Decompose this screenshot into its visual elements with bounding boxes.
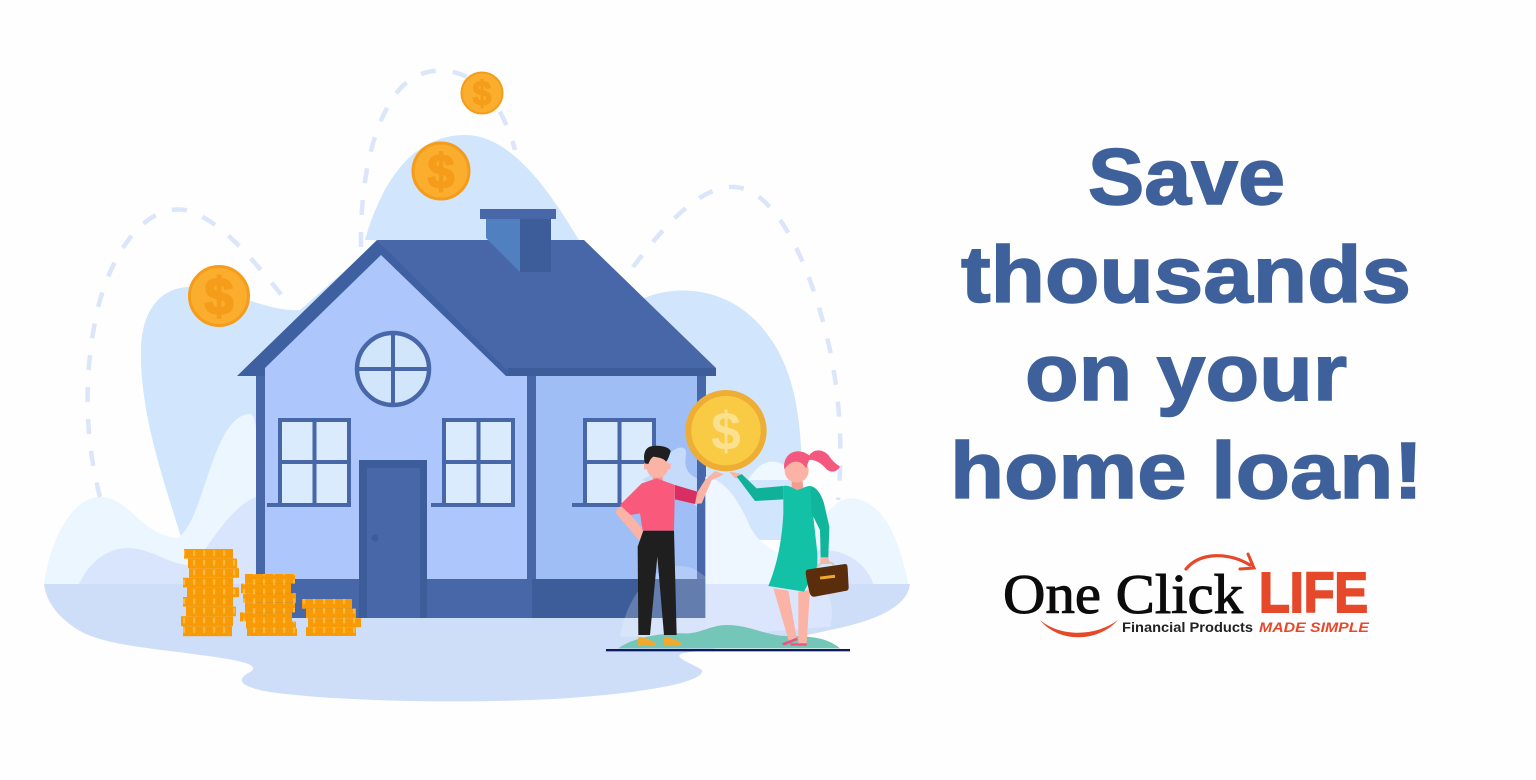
ground (44, 584, 910, 701)
pale hills (44, 414, 258, 584)
woman: hand (729, 472, 743, 478)
stack 2 (240, 574, 297, 636)
logo LIFE: LIFE (1259, 561, 1368, 625)
woman: far sleeve (810, 486, 829, 557)
door (359, 460, 427, 618)
logo: One Click Life (1003, 554, 1370, 637)
hill right of the house (705, 477, 817, 584)
man: arms skin (616, 471, 724, 546)
floating coin: middle: $ (428, 146, 455, 199)
logo swoosh (1040, 620, 1118, 637)
woman: neck and head (792, 480, 803, 490)
translucent hill over house base (620, 566, 705, 637)
floating coin: middle (413, 143, 469, 199)
man: sleeve (675, 485, 697, 504)
green mound (618, 625, 840, 648)
logo wordmark: One Click (1003, 564, 1243, 626)
left window (267, 420, 351, 507)
house (237, 209, 716, 618)
man: shoes (638, 637, 682, 646)
base (256, 579, 706, 618)
logo slogan: MADE SIMPLE (1259, 620, 1370, 635)
floating coin: left: $ (205, 268, 234, 326)
man: trousers (638, 531, 677, 635)
logo tagline: Financial Products (1122, 620, 1253, 635)
floating coin: top (462, 72, 502, 114)
woman: legs (773, 588, 810, 643)
man: hair (644, 446, 671, 464)
woman: near sleeve (737, 474, 783, 501)
man (616, 446, 724, 646)
illustration background: hills and ground (44, 135, 910, 701)
headline line 3: on your (1025, 328, 1347, 417)
people scene (606, 390, 908, 651)
blue blobs (141, 135, 802, 540)
cloud behind woman (748, 462, 797, 480)
headline line 1: Save (1088, 132, 1285, 221)
hill right of the woman (813, 498, 908, 584)
roof (237, 240, 716, 376)
floating coin: left (190, 266, 248, 326)
headline (950, 132, 1423, 515)
foreground hills (620, 448, 908, 637)
stack 3 (302, 599, 361, 636)
walls (256, 250, 702, 580)
headline line 4: home loan! (950, 426, 1423, 515)
woman: dress (768, 486, 817, 592)
man: head (644, 453, 671, 478)
mid hill right of the woman (817, 550, 873, 584)
large coin (685, 390, 767, 471)
logo arrow (1186, 554, 1254, 569)
coin stacks (181, 549, 361, 636)
round window (357, 333, 429, 405)
hill over house wall (642, 448, 697, 507)
chimney (480, 209, 556, 272)
headline line 2: thousands (961, 230, 1411, 319)
right window (572, 420, 656, 507)
woman: hand on bag (820, 557, 830, 564)
floor line (606, 649, 850, 651)
woman (729, 450, 849, 646)
briefcase (806, 562, 849, 597)
floating coin: top: $ (473, 75, 492, 113)
woman: hair and ponytail (784, 450, 840, 472)
man: shirt (620, 478, 675, 531)
stack 1 (181, 549, 239, 636)
woman: shoes (782, 638, 807, 646)
man: neck (653, 473, 663, 482)
wall columns (256, 376, 706, 580)
large coin: $ (711, 402, 741, 461)
dashed coin trajectories (88, 71, 840, 500)
ground patch (705, 584, 832, 637)
middle window (431, 420, 515, 507)
